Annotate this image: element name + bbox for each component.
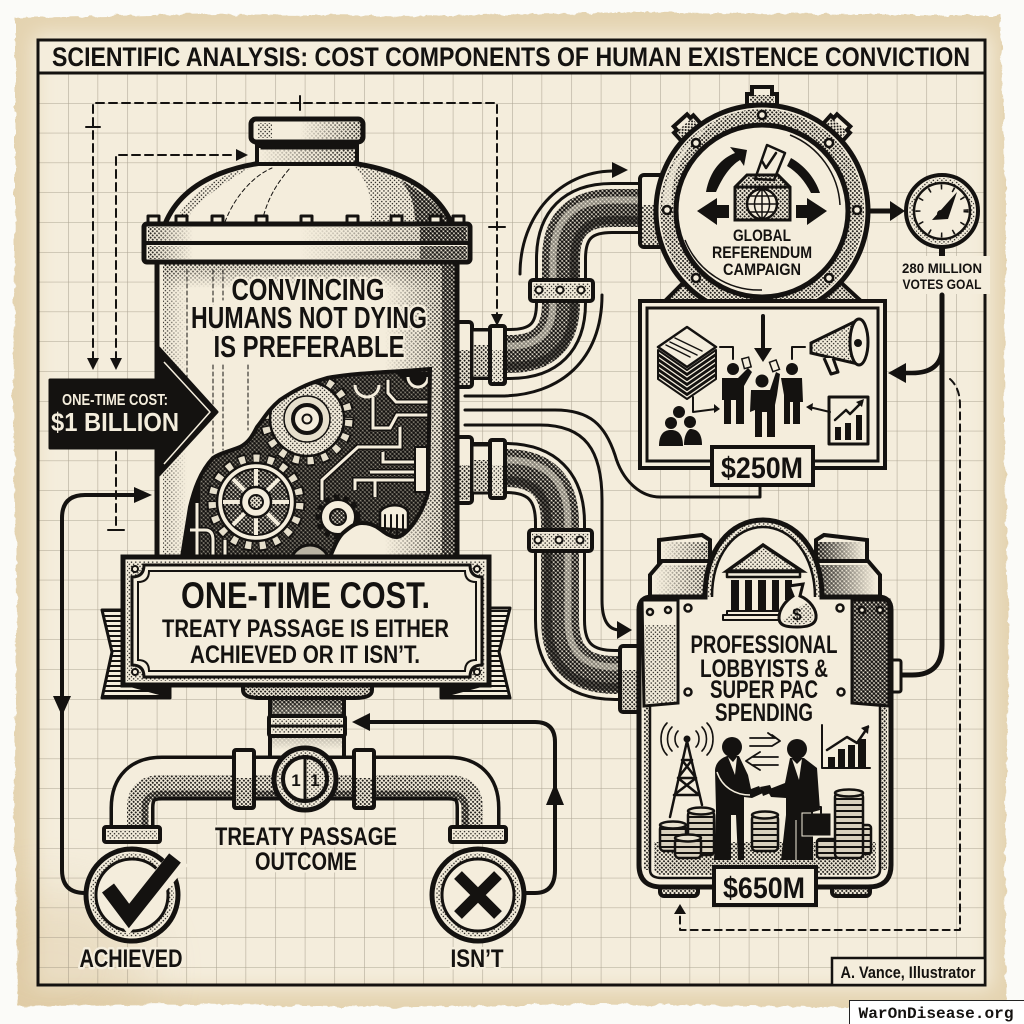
cutaway machinery bbox=[180, 366, 432, 554]
votes goal label: VOTES GOAL bbox=[902, 276, 982, 292]
vault label: LOBBYISTS & bbox=[700, 655, 828, 683]
vault label bbox=[690, 631, 838, 727]
rim bolts bbox=[663, 111, 861, 310]
upper pipe flange bbox=[530, 280, 593, 301]
icon: surrounding arrows bbox=[697, 147, 827, 225]
top bolts bbox=[671, 87, 853, 141]
illustrator credit bbox=[832, 958, 985, 985]
achieved label: ACHIEVED bbox=[80, 945, 182, 973]
icon: left businessman bbox=[714, 737, 763, 860]
connector lines bbox=[693, 347, 830, 413]
manifold flanges bbox=[104, 750, 506, 842]
icon: three campaigners bbox=[722, 357, 803, 437]
watermark bbox=[850, 1000, 1024, 1024]
one-time cost banner: TREATY PASSAGE IS EITHER bbox=[162, 615, 449, 643]
arrow into panel bbox=[754, 316, 772, 362]
icon: right businessman bbox=[760, 739, 820, 860]
vault caps and shoulders bbox=[650, 535, 880, 600]
cost tag $250M: $250M bbox=[721, 452, 803, 485]
referendum label bbox=[712, 226, 812, 279]
module: lobbying vault bbox=[639, 520, 901, 905]
one-time cost banner: ACHIEVED OR IT ISN’T. bbox=[190, 641, 420, 669]
illustrator credit: A. Vance, Illustrator bbox=[840, 963, 976, 982]
upper pipe tank coupling bbox=[457, 322, 505, 387]
arrow: module to gauge bbox=[868, 201, 905, 221]
cost tag $650M: $650M bbox=[723, 872, 805, 905]
support bracket bbox=[664, 278, 862, 302]
vault feet bbox=[660, 878, 870, 896]
tank heading: HUMANS NOT DYING bbox=[191, 300, 427, 335]
achieved loop arrow bbox=[53, 487, 152, 893]
icon: megaphone bbox=[811, 319, 868, 374]
side coupling bbox=[888, 660, 901, 692]
vault label: SPENDING bbox=[715, 699, 813, 727]
icon: ballot box with globe bbox=[735, 145, 790, 220]
icon: radio tower bbox=[661, 723, 713, 817]
isn't label: ISN’T bbox=[450, 945, 504, 973]
one-time cost arrow bbox=[50, 348, 217, 475]
icon: money bag: $ bbox=[792, 605, 802, 624]
vault floor bbox=[654, 842, 876, 875]
dashed guide lines to the tank bbox=[86, 96, 505, 530]
one-time cost arrow: $1 BILLION bbox=[51, 407, 179, 437]
tank heading bbox=[191, 272, 427, 364]
lower pipe tank coupling bbox=[457, 437, 505, 503]
one-time cost banner bbox=[102, 557, 510, 698]
circuit traces bbox=[190, 377, 430, 557]
icon: trend chart bbox=[822, 725, 870, 768]
tank neck and cap bbox=[251, 119, 363, 164]
thin flow arrows between tank and modules bbox=[465, 162, 760, 639]
bottom gear bbox=[291, 544, 329, 554]
feedback line to panels bbox=[888, 295, 942, 675]
campaign activities panel bbox=[640, 301, 885, 485]
achieved gauge bbox=[86, 849, 180, 941]
icon: trend chart bbox=[829, 397, 868, 444]
lower pipe to lobbyists bbox=[457, 437, 640, 712]
icon: government building bbox=[723, 545, 802, 620]
treaty passage outcome label: OUTCOME bbox=[255, 848, 357, 876]
isn't gauge bbox=[432, 849, 524, 941]
dashed return line to vault bbox=[674, 379, 960, 930]
upper gear bbox=[266, 378, 348, 460]
referendum label: CAMPAIGN bbox=[723, 260, 801, 279]
votes goal label bbox=[898, 256, 990, 294]
coin stacks bbox=[660, 790, 871, 858]
lower pipe flange bbox=[529, 530, 592, 551]
icon: briefcase bbox=[802, 807, 831, 836]
vault label: SUPER PAC bbox=[710, 676, 818, 704]
pressure gauge bbox=[906, 175, 978, 257]
referendum label: GLOBAL bbox=[733, 226, 791, 245]
icon: group of people bbox=[659, 406, 702, 446]
tank dome bbox=[148, 160, 464, 224]
icon: money bag bbox=[779, 584, 816, 627]
small gear bbox=[320, 499, 356, 535]
vault label: PROFESSIONAL bbox=[690, 631, 838, 659]
referendum label: REFERENDUM bbox=[712, 243, 812, 262]
ribbon tails bbox=[102, 608, 510, 698]
one-time cost arrow: ONE-TIME COST: bbox=[62, 392, 168, 409]
lower gear bbox=[213, 459, 299, 545]
treaty passage outcome label: TREATY PASSAGE bbox=[215, 823, 397, 851]
vault body bbox=[639, 520, 891, 887]
side plates bbox=[642, 600, 889, 706]
module: global referendum campaign bbox=[640, 87, 868, 317]
tank bbox=[144, 119, 470, 585]
one-time cost banner: ONE-TIME COST. bbox=[181, 575, 430, 616]
icon: exchange arrows bbox=[746, 733, 780, 770]
tank heading: CONVINCING bbox=[232, 272, 384, 307]
votes goal label: 280 MILLION bbox=[902, 260, 982, 276]
lower pipe vault coupling bbox=[620, 646, 640, 712]
bottom outlet and valve manifold bbox=[104, 683, 506, 842]
valve counter: 1 bbox=[310, 771, 320, 790]
isn't loop arrow bbox=[352, 713, 564, 893]
tank body bbox=[157, 258, 457, 558]
valve counter: 1 bbox=[291, 771, 301, 790]
watermark: WarOnDisease.org bbox=[858, 1005, 1014, 1023]
tank flange bbox=[144, 224, 470, 262]
icon: paper stack bbox=[658, 327, 716, 399]
valve counter bbox=[274, 748, 336, 810]
upper pipe to referendum bbox=[457, 200, 650, 387]
treaty passage outcome label bbox=[215, 823, 397, 876]
coupling bbox=[640, 175, 664, 247]
tank heading: IS PREFERABLE bbox=[214, 329, 404, 364]
